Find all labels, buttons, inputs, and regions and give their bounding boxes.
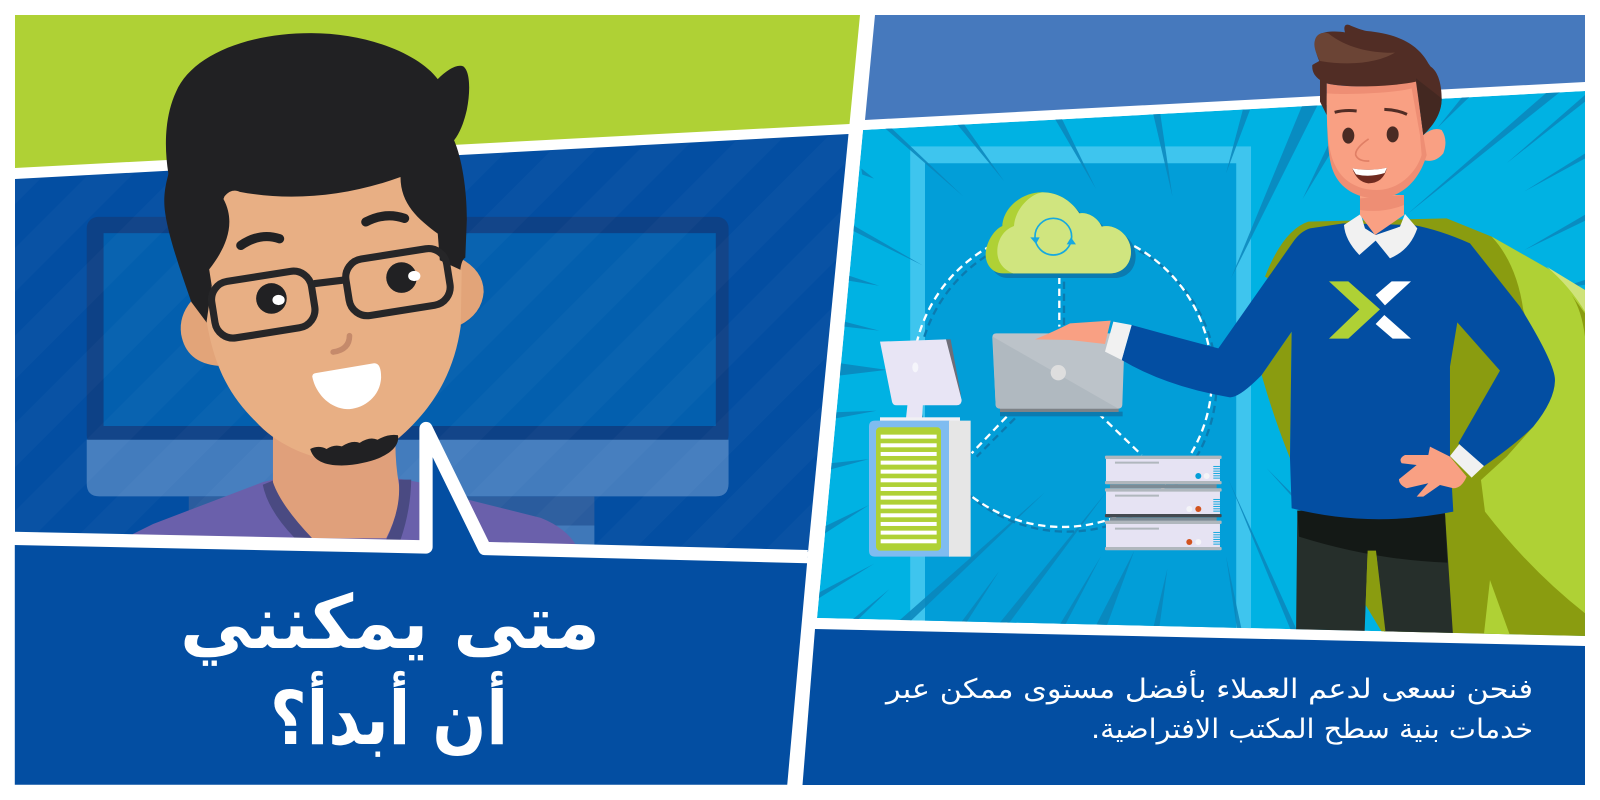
smile: [312, 363, 381, 409]
collar: [1344, 214, 1417, 258]
shirt: [133, 479, 577, 546]
logo: [1329, 281, 1411, 339]
ear: [1423, 129, 1445, 161]
comic rays: [818, 92, 1586, 633]
hair: [1312, 25, 1442, 135]
diagram: dashed network: [869, 192, 1222, 557]
smile: [1352, 168, 1387, 183]
door frame: [818, 92, 1586, 638]
sweater: [1122, 223, 1555, 519]
face: [207, 177, 462, 461]
illustration: man with glasses: [133, 33, 577, 546]
collar: [263, 480, 411, 540]
speech tail outline: [8, 429, 808, 557]
eyes: [256, 262, 420, 314]
icon: server stack: [1105, 456, 1222, 550]
ears: [181, 258, 484, 366]
cape: [1262, 218, 1585, 640]
heading: متى يمكنني: [180, 580, 600, 666]
eyes: [1342, 126, 1399, 144]
neck: [1360, 195, 1404, 235]
icon: cloud: [986, 192, 1136, 278]
panel: cyan scene: [817, 91, 1586, 638]
neck: [273, 434, 399, 538]
nose: [1356, 139, 1369, 161]
eyebrows: [241, 216, 405, 245]
hair: [164, 33, 469, 322]
eyebrows: [1335, 109, 1407, 114]
nose: [333, 336, 349, 352]
icon: tower: [869, 417, 971, 557]
body text: خدمات بنية سطح المكتب الافتراضية.: [1091, 714, 1533, 745]
glasses: [209, 246, 453, 341]
desktop monitor: [87, 217, 729, 546]
hands: [1035, 321, 1467, 497]
panel: office scene: [15, 134, 848, 552]
body text: فنحن نسعى لدعم العملاء بأفضل مستوى ممكن عبر: [884, 669, 1533, 705]
panel: blue top right: [865, 15, 1585, 120]
illustration: superhero man body: [1035, 214, 1585, 640]
beard: [310, 435, 398, 465]
trousers: [1296, 511, 1453, 640]
icon: laptop: [992, 333, 1125, 416]
heading: [180, 580, 600, 762]
illustration: superhero man head: [1312, 25, 1445, 235]
dashed connectors: [913, 228, 1217, 532]
icon: desktop monitor: [880, 339, 962, 418]
panel: green top left: [15, 15, 860, 168]
body text: [884, 669, 1533, 745]
heading: أن أبدأ؟: [270, 670, 508, 762]
panel: description: [802, 629, 1585, 785]
panel: question with speech tail: [8, 429, 808, 785]
face: [1327, 80, 1427, 198]
cuffs: [1105, 322, 1484, 478]
